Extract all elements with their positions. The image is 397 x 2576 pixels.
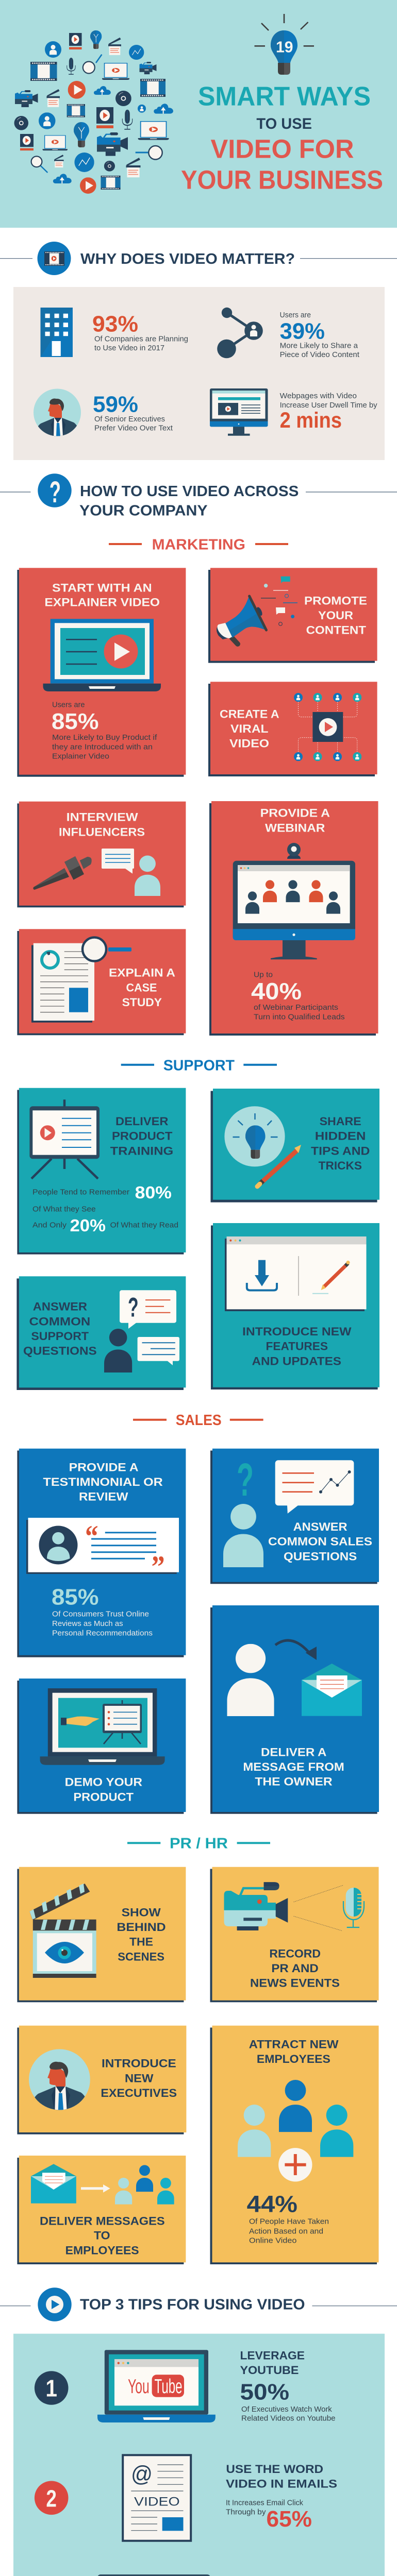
icon: envelope	[31, 2164, 76, 2204]
decorative speech shapes	[261, 577, 297, 625]
stat: 2 mins: Webpages with Video	[280, 392, 357, 400]
card title: PROVIDE A	[260, 807, 330, 820]
card title	[243, 1745, 344, 1788]
card title: DEMO YOUR	[65, 1776, 142, 1789]
stat: 40 percent: Up to	[254, 971, 273, 979]
tip text: leverage youtube: LEVERAGE	[240, 2349, 305, 2362]
icon cluster: video themed icons	[14, 30, 173, 194]
card title: CREATE A	[220, 707, 279, 720]
tip number 2: 2	[46, 2485, 57, 2512]
card title: TRAINING	[110, 1144, 173, 1157]
icon: megaphone	[217, 596, 266, 644]
card title: WEBINAR	[265, 821, 325, 834]
card title: EMPLOYEES	[65, 2244, 139, 2257]
stat: 59 percent	[93, 392, 173, 433]
heading: top 3 tips for using video	[0, 2287, 397, 2321]
dotted recording beam	[294, 1885, 343, 1931]
stat: 85 percent trust reviews: Of Consumers Trust Online	[52, 1610, 149, 1619]
stat: 40 percent: 40%	[251, 978, 302, 1004]
card title	[249, 2038, 339, 2065]
card title: DELIVER A	[261, 1745, 327, 1758]
panel: promote your content	[208, 568, 377, 663]
stat: 44 percent: 44%	[247, 2191, 297, 2217]
stat: 44 percent: Of People Have Taken	[249, 2217, 329, 2226]
card title: INTRODUCE	[102, 2057, 176, 2070]
panel: why video matters stats	[13, 287, 385, 460]
card title: TIPS AND	[311, 1144, 370, 1157]
stat: remember 80 and 20 percent: 20%	[70, 1216, 106, 1235]
stat: remember 80 and 20 percent: Of What they See	[32, 1205, 96, 1213]
card title: SCENES	[118, 1950, 164, 1963]
panel: top 3 tips	[13, 2334, 385, 2576]
stat: 39 percent: Users are	[280, 311, 311, 319]
icon: share network	[217, 308, 263, 358]
stat: 93 percent: to Use Video in 2017	[94, 344, 164, 352]
stat: 39 percent: More Likely to Share a	[280, 342, 358, 350]
stat: 93 percent: Of Companies are Planning	[94, 335, 188, 344]
stat: 40 percent: of Webinar Participants	[254, 1003, 338, 1012]
stat: 44 percent	[247, 2191, 329, 2245]
testimonial card: “	[85, 1519, 98, 1553]
stat: remember 80 and 20 percent: People Tend to Remember	[32, 1188, 129, 1196]
icon: lightbulb and pencil	[224, 1106, 301, 1187]
card title	[43, 1461, 163, 1503]
stat: 39 percent: Piece of Video Content	[280, 351, 359, 359]
icon group: employees with plus	[238, 2080, 353, 2181]
panel: start with an explainer video	[17, 568, 186, 777]
card title: PRODUCT	[112, 1130, 173, 1143]
card title	[59, 811, 145, 838]
card title: ANSWER	[33, 1300, 87, 1313]
diagram: viral video network	[294, 693, 361, 761]
stat: 39 percent: 39%	[280, 318, 325, 344]
card title: INTERVIEW	[67, 811, 138, 824]
title	[181, 81, 383, 195]
card title	[117, 1906, 166, 1963]
card title	[250, 1947, 340, 1990]
tip text: leverage youtube: YOUTUBE	[240, 2364, 299, 2377]
icon: office building	[40, 308, 73, 357]
heading: support: SUPPORT	[163, 1057, 235, 1074]
icon: email document: @	[131, 2462, 153, 2486]
panel: show behind the scenes	[17, 1867, 186, 2002]
card title: YOUR	[318, 609, 353, 622]
tip text: use the word video in emails: Through by	[226, 2508, 266, 2516]
heading: how to use video across your company	[0, 473, 397, 519]
icon: presentation easel	[29, 1099, 100, 1179]
title: SMART WAYS	[198, 81, 371, 111]
stat: 93 percent	[92, 311, 188, 352]
card title: TRICKS	[319, 1159, 362, 1172]
icon: owner person	[227, 1644, 274, 1716]
card title: QUESTIONS	[284, 1550, 357, 1563]
stat: 85 percent trust reviews: Reviews as Much as	[52, 1619, 123, 1628]
card title: NEWS EVENTS	[250, 1977, 340, 1990]
title: YOUR BUSINESS	[181, 165, 383, 195]
card title: BEHIND	[117, 1921, 166, 1934]
panel: provide a webinar	[209, 801, 378, 1036]
heading: marketing: MARKETING	[152, 537, 245, 553]
icon: desktop monitor webpage	[210, 388, 268, 436]
tip number 2	[35, 2481, 68, 2515]
heading: why does video matter	[0, 242, 397, 275]
stat: 85 percent buy	[52, 701, 157, 760]
card title	[44, 582, 160, 609]
card title	[110, 1115, 173, 1157]
icon: person with question mark	[223, 1454, 263, 1567]
card title: STUDY	[122, 996, 162, 1009]
card title	[23, 1300, 97, 1358]
testimonial card	[26, 1518, 179, 1584]
tip text: use the word video in emails: It Increases Email Click	[226, 2499, 304, 2507]
card title	[220, 707, 279, 750]
card title: HIDDEN	[315, 1130, 366, 1143]
tip text: leverage youtube: 50%	[240, 2380, 289, 2405]
stat: 59 percent: Prefer Video Over Text	[94, 425, 173, 433]
question bubble	[120, 1290, 176, 1329]
icon: person	[104, 1329, 132, 1372]
card title: SUPPORT	[31, 1330, 89, 1343]
stat: 39 percent	[280, 311, 359, 359]
stat: 2 mins: 2 mins	[280, 408, 342, 433]
arrow to envelope	[275, 1640, 317, 1660]
tip text: use the word video in emails: 65%	[266, 2506, 312, 2532]
icon: browser window with download and pencil	[225, 1236, 366, 1311]
stat: 85 percent trust reviews: Personal Recommendations	[52, 1629, 153, 1637]
icon: webcam	[287, 843, 301, 859]
card title: VIDEO	[229, 737, 269, 750]
panel: introduce new executives	[17, 2026, 186, 2134]
card title	[101, 2057, 177, 2099]
card title	[65, 1776, 142, 1803]
panel: create a viral video	[208, 682, 377, 776]
icon: laptop with youtube: Tube	[155, 2376, 183, 2398]
card title: VIRAL	[230, 722, 268, 735]
card title	[304, 594, 367, 637]
stat: remember 80 and 20 percent	[32, 1183, 178, 1235]
card title: DELIVER	[115, 1115, 169, 1128]
heading: how to use video across your company: YOUR COMPANY	[79, 503, 208, 519]
stat: remember 80 and 20 percent: And Only	[32, 1221, 67, 1230]
icon: monitor with webinar audience	[233, 861, 355, 959]
tip text: use the word video in emails: VIDEO IN EMAILS	[226, 2478, 337, 2490]
card title: THE OWNER	[255, 1775, 333, 1788]
card title: CONTENT	[306, 624, 367, 637]
icon: lightbulb with 19	[255, 14, 314, 75]
card title: THE	[129, 1936, 153, 1948]
panel: record pr and news events	[210, 1867, 378, 2002]
stat: 40 percent: Turn into Qualified Leads	[254, 1012, 345, 1021]
stat: 2 mins	[280, 392, 377, 433]
panel: hero header	[0, 0, 397, 228]
icon: microphone	[33, 856, 92, 890]
icon group: employees	[115, 2165, 174, 2205]
icon: lightbulb with 19: 19	[276, 38, 293, 56]
stat: 59 percent: Of Senior Executives	[94, 415, 165, 423]
card title: QUESTIONS	[23, 1345, 97, 1358]
panel: introduce new features and updates	[211, 1223, 379, 1389]
stat: 93 percent: 93%	[92, 311, 138, 336]
card title	[242, 1325, 352, 1367]
arrow	[81, 2184, 110, 2193]
card title: RECORD	[269, 1947, 321, 1960]
panel: answer common sales questions	[210, 1449, 379, 1584]
heading: why does video matter: WHY DOES VIDEO MATTER?	[80, 251, 295, 267]
tip text: leverage youtube: Of Executives Watch Work	[241, 2405, 332, 2414]
card title: PRODUCT	[73, 1790, 134, 1803]
card title: AND UPDATES	[252, 1354, 341, 1367]
card title: SHARE	[320, 1115, 361, 1128]
card title: INTRODUCE NEW	[242, 1325, 352, 1338]
stat: 59 percent: 59%	[93, 392, 138, 417]
stat: 85 percent buy: Users are	[52, 701, 85, 709]
icon: case study document with magnifier	[31, 938, 131, 1023]
tip number 1: 1	[45, 2375, 57, 2402]
heading: how to use video across your company: HOW TO USE VIDEO ACROSS	[80, 483, 299, 500]
stat: remember 80 and 20 percent: 80%	[135, 1183, 172, 1202]
card title: EXECUTIVES	[101, 2087, 177, 2099]
card title: PROVIDE A	[69, 1461, 139, 1473]
stat: 85 percent buy: 85%	[52, 709, 99, 734]
stat: 85 percent buy: Explainer Video	[52, 752, 109, 760]
heading: sales: SALES	[176, 1412, 222, 1429]
icon: email document: VIDEO	[134, 2495, 180, 2509]
stat: 40 percent	[251, 971, 345, 1021]
card title: TESTIMNONIAL OR	[43, 1476, 163, 1488]
card title: EXPLAINER VIDEO	[44, 596, 160, 609]
stat: remember 80 and 20 percent: Of What they Read	[110, 1221, 178, 1230]
card title: ANSWER	[293, 1520, 348, 1533]
card title: TO	[94, 2229, 110, 2242]
speech bubble with chart	[275, 1460, 354, 1514]
stat: 85 percent trust reviews	[52, 1584, 153, 1637]
stat: 85 percent buy: they are Introduced with an	[52, 742, 153, 751]
icon: email document	[123, 2455, 191, 2541]
card title: FEATURES	[266, 1340, 328, 1353]
panel: share hidden tips and tricks	[210, 1089, 379, 1202]
icon: video camera	[224, 1882, 288, 1930]
stat: 85 percent buy: More Likely to Buy Product if	[52, 733, 157, 742]
card title: CASE	[126, 981, 157, 994]
icon: person with question mark: ?	[237, 1454, 254, 1506]
card title	[268, 1520, 372, 1563]
panel: deliver a message from the owner	[210, 1605, 379, 1814]
icon: monitor landing page	[97, 2574, 210, 2576]
card title: COMMON	[29, 1315, 90, 1328]
card title	[311, 1115, 370, 1172]
tip text: leverage youtube: Related Videos on Youtube	[241, 2414, 336, 2422]
panel: provide a testimonial or review	[17, 1449, 186, 1657]
tip text: use the word video in emails	[226, 2463, 337, 2532]
tip text: use the word video in emails: USE THE WORD	[226, 2463, 323, 2476]
panel: demo your product	[17, 1679, 186, 1814]
icon: laptop with youtube: You	[128, 2376, 150, 2398]
card title	[40, 2214, 165, 2257]
question bubble: ?	[128, 1293, 139, 1323]
speech bubble	[102, 849, 134, 874]
title: VIDEO FOR	[210, 134, 354, 164]
card title	[109, 967, 175, 1009]
panel: deliver product training	[17, 1088, 186, 1255]
card title: ATTRACT NEW	[249, 2038, 339, 2050]
card title: INFLUENCERS	[59, 825, 145, 838]
card title: SHOW	[122, 1906, 161, 1919]
icon: laptop product demo	[40, 1688, 165, 1765]
stat: 85 percent trust reviews: 85%	[52, 1584, 99, 1609]
tip text: leverage youtube	[240, 2349, 336, 2422]
card title	[260, 807, 330, 834]
icon: interviewee person	[135, 855, 160, 896]
panel: deliver messages to employees	[17, 2156, 186, 2264]
heading: pr / hr: PR / HR	[170, 1835, 228, 1852]
title: TO USE	[256, 115, 312, 132]
card title: MESSAGE FROM	[243, 1760, 344, 1773]
stat: 2 mins: Increase User Dwell Time by	[280, 401, 377, 410]
testimonial card: ”	[152, 1550, 165, 1584]
answer bubble	[138, 1337, 179, 1365]
card title: PROMOTE	[304, 594, 367, 607]
icon: microphone	[343, 1888, 364, 1927]
card title: REVIEW	[79, 1490, 128, 1503]
card title: PR AND	[271, 1962, 319, 1975]
panel: interview influencers	[17, 802, 186, 907]
tip number 1	[35, 2371, 68, 2405]
card title: START WITH AN	[52, 582, 152, 595]
stat: 44 percent: Action Based on and	[249, 2227, 323, 2235]
heading: how to use video across your company: ?	[49, 476, 61, 509]
card title: NEW	[125, 2072, 154, 2084]
card title: EXPLAIN A	[109, 967, 175, 979]
icon: laptop with youtube	[97, 2350, 216, 2422]
icon: envelope	[302, 1664, 362, 1716]
heading: top 3 tips for using video: TOP 3 TIPS FOR USING VIDEO	[80, 2297, 305, 2313]
card title: DELIVER MESSAGES	[40, 2214, 165, 2227]
panel: answer common support questions	[16, 1276, 186, 1390]
panel: attract new employees	[210, 2026, 378, 2264]
icon: clapperboard with eye	[29, 1884, 96, 1978]
icon: executive portrait	[34, 388, 81, 436]
panel: explain a case study	[17, 929, 186, 1035]
card title: COMMON SALES	[268, 1535, 372, 1548]
icon: laptop with explainer video	[43, 619, 161, 691]
stat: 44 percent: Online Video	[249, 2236, 296, 2245]
card title: EMPLOYEES	[257, 2053, 330, 2065]
icon: executive portrait	[29, 2049, 90, 2110]
